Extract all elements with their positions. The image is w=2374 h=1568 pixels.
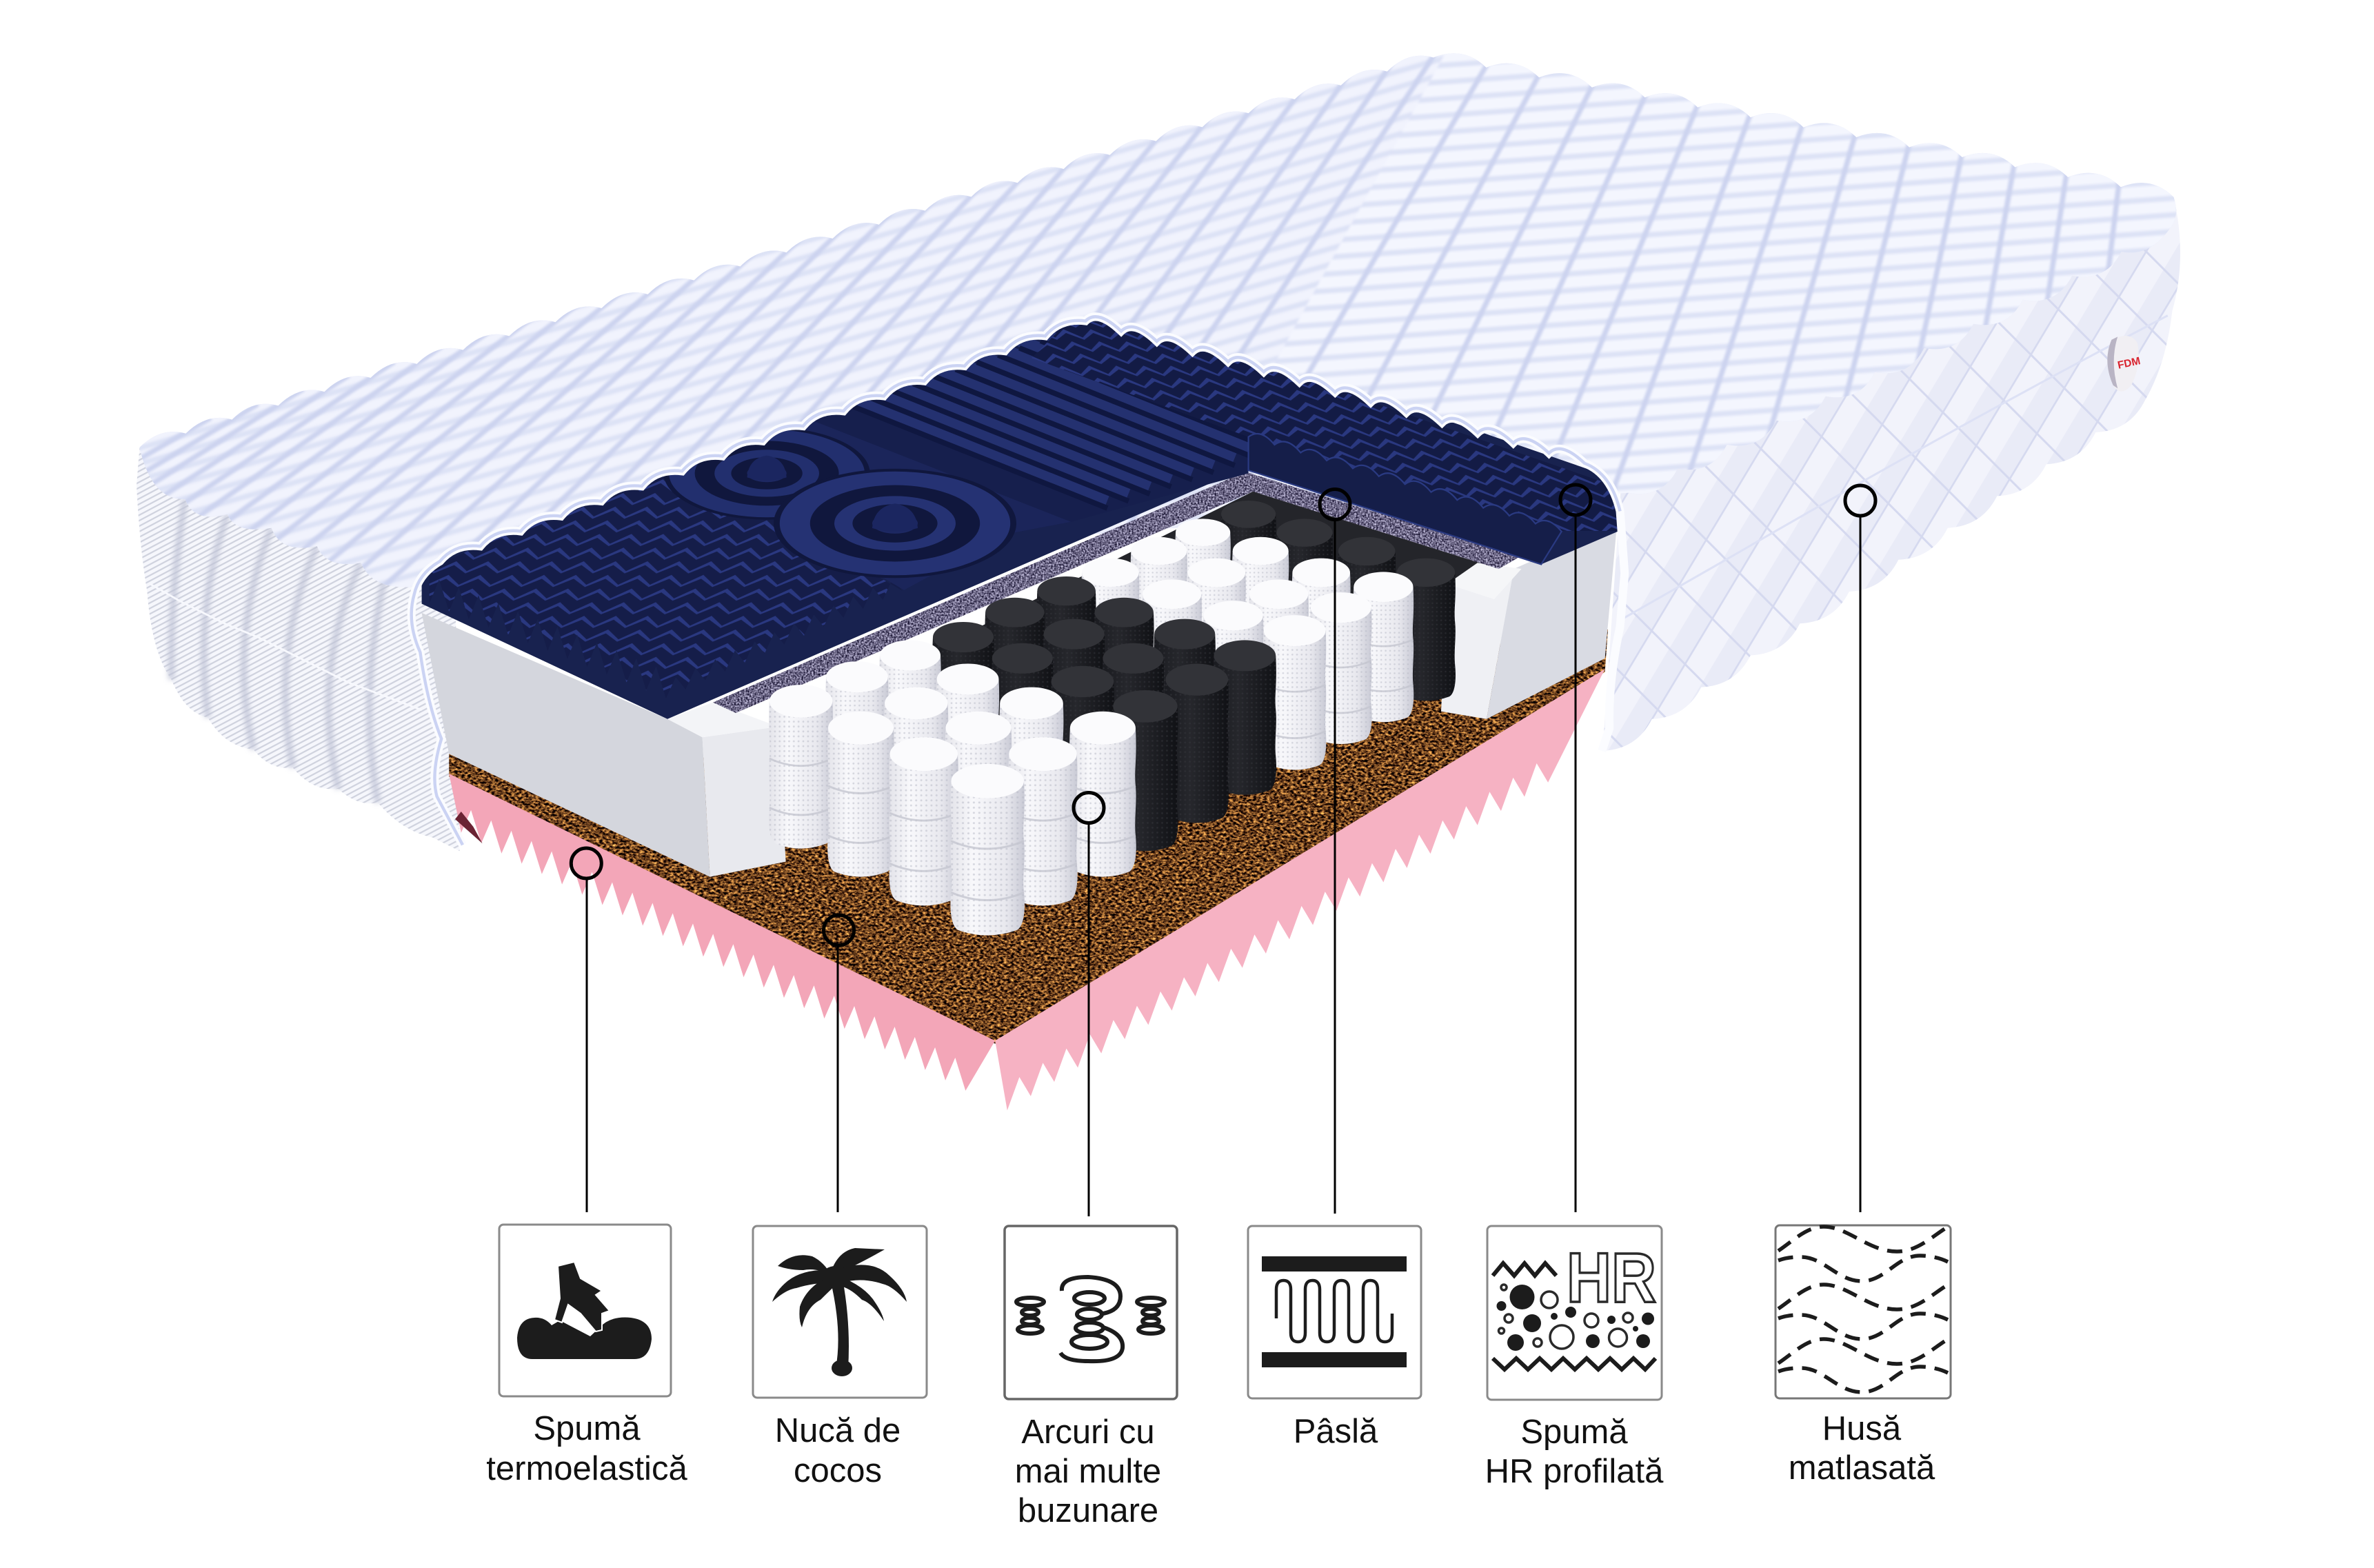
felt layer <box>713 472 1520 713</box>
label: Spumă HR profilată: HR profilată <box>1485 1453 1664 1490</box>
icon: pocket springs <box>1005 1226 1177 1399</box>
icon: quilted cover <box>1776 1225 1951 1398</box>
callout: quilted cover <box>1845 485 1875 1212</box>
label: Spumă termoelastică: termoelastică <box>486 1450 687 1487</box>
right side of cover <box>1602 197 2180 751</box>
interior layers seen through the cut <box>422 296 1636 1110</box>
callout lines with circle markers <box>571 485 1875 1216</box>
right white foam block <box>1441 523 1617 719</box>
coconut fibre layer <box>449 630 1608 1044</box>
label: Spumă HR profilată: Spumă <box>1520 1414 1628 1451</box>
label: Nucă de cocos: cocos <box>794 1452 882 1489</box>
profiled foam: massage rings <box>663 417 1071 590</box>
left side of cover <box>137 448 460 851</box>
label: Arcuri cu mai multe buzunare: Arcuri cu <box>1021 1414 1155 1451</box>
icon: HR foam: HR <box>1567 1238 1656 1317</box>
profiled HR foam: dark base <box>422 392 1618 719</box>
dark cavity behind springs <box>983 491 1482 627</box>
icon: memory foam with hand <box>499 1225 671 1396</box>
profiled foam: egg-crate strip right <box>1032 303 1636 564</box>
callout: pocket springs <box>1074 793 1104 1216</box>
mattress illustration <box>0 0 2275 1110</box>
label: Spumă termoelastică: Spumă <box>533 1410 641 1447</box>
icon: palm tree <box>753 1226 927 1398</box>
profiled foam: egg-crate zone left <box>429 479 888 691</box>
icon: felt <box>1248 1226 1421 1398</box>
icon: HR foam <box>1487 1226 1662 1400</box>
label: Husă matlasată: Husă <box>1822 1410 1902 1447</box>
care label on side <box>2107 336 2142 392</box>
label: Nucă de cocos: Nucă de <box>775 1412 901 1449</box>
label: Arcuri cu mai multe buzunare: buzunare <box>1018 1492 1158 1529</box>
callout: felt <box>1320 490 1350 1214</box>
label: Husă matlasată: matlasată <box>1789 1449 1935 1487</box>
left white foam block <box>422 613 786 877</box>
label: Arcuri cu mai multe buzunare: mai multe <box>1015 1453 1161 1490</box>
label: Pâslă: Pâslă <box>1294 1413 1378 1450</box>
callout: memory foam <box>571 848 601 1212</box>
zipper piping around the cut <box>412 316 1624 845</box>
pocket springs <box>769 501 1456 936</box>
top of cover with quilting <box>139 53 2176 587</box>
profiled foam: channel ridges <box>852 332 1249 510</box>
callout: coconut <box>823 915 854 1212</box>
callout: HR foam <box>1560 485 1591 1212</box>
care label on side: FDM <box>2117 355 2142 372</box>
pink memory foam layer <box>449 669 1605 1110</box>
